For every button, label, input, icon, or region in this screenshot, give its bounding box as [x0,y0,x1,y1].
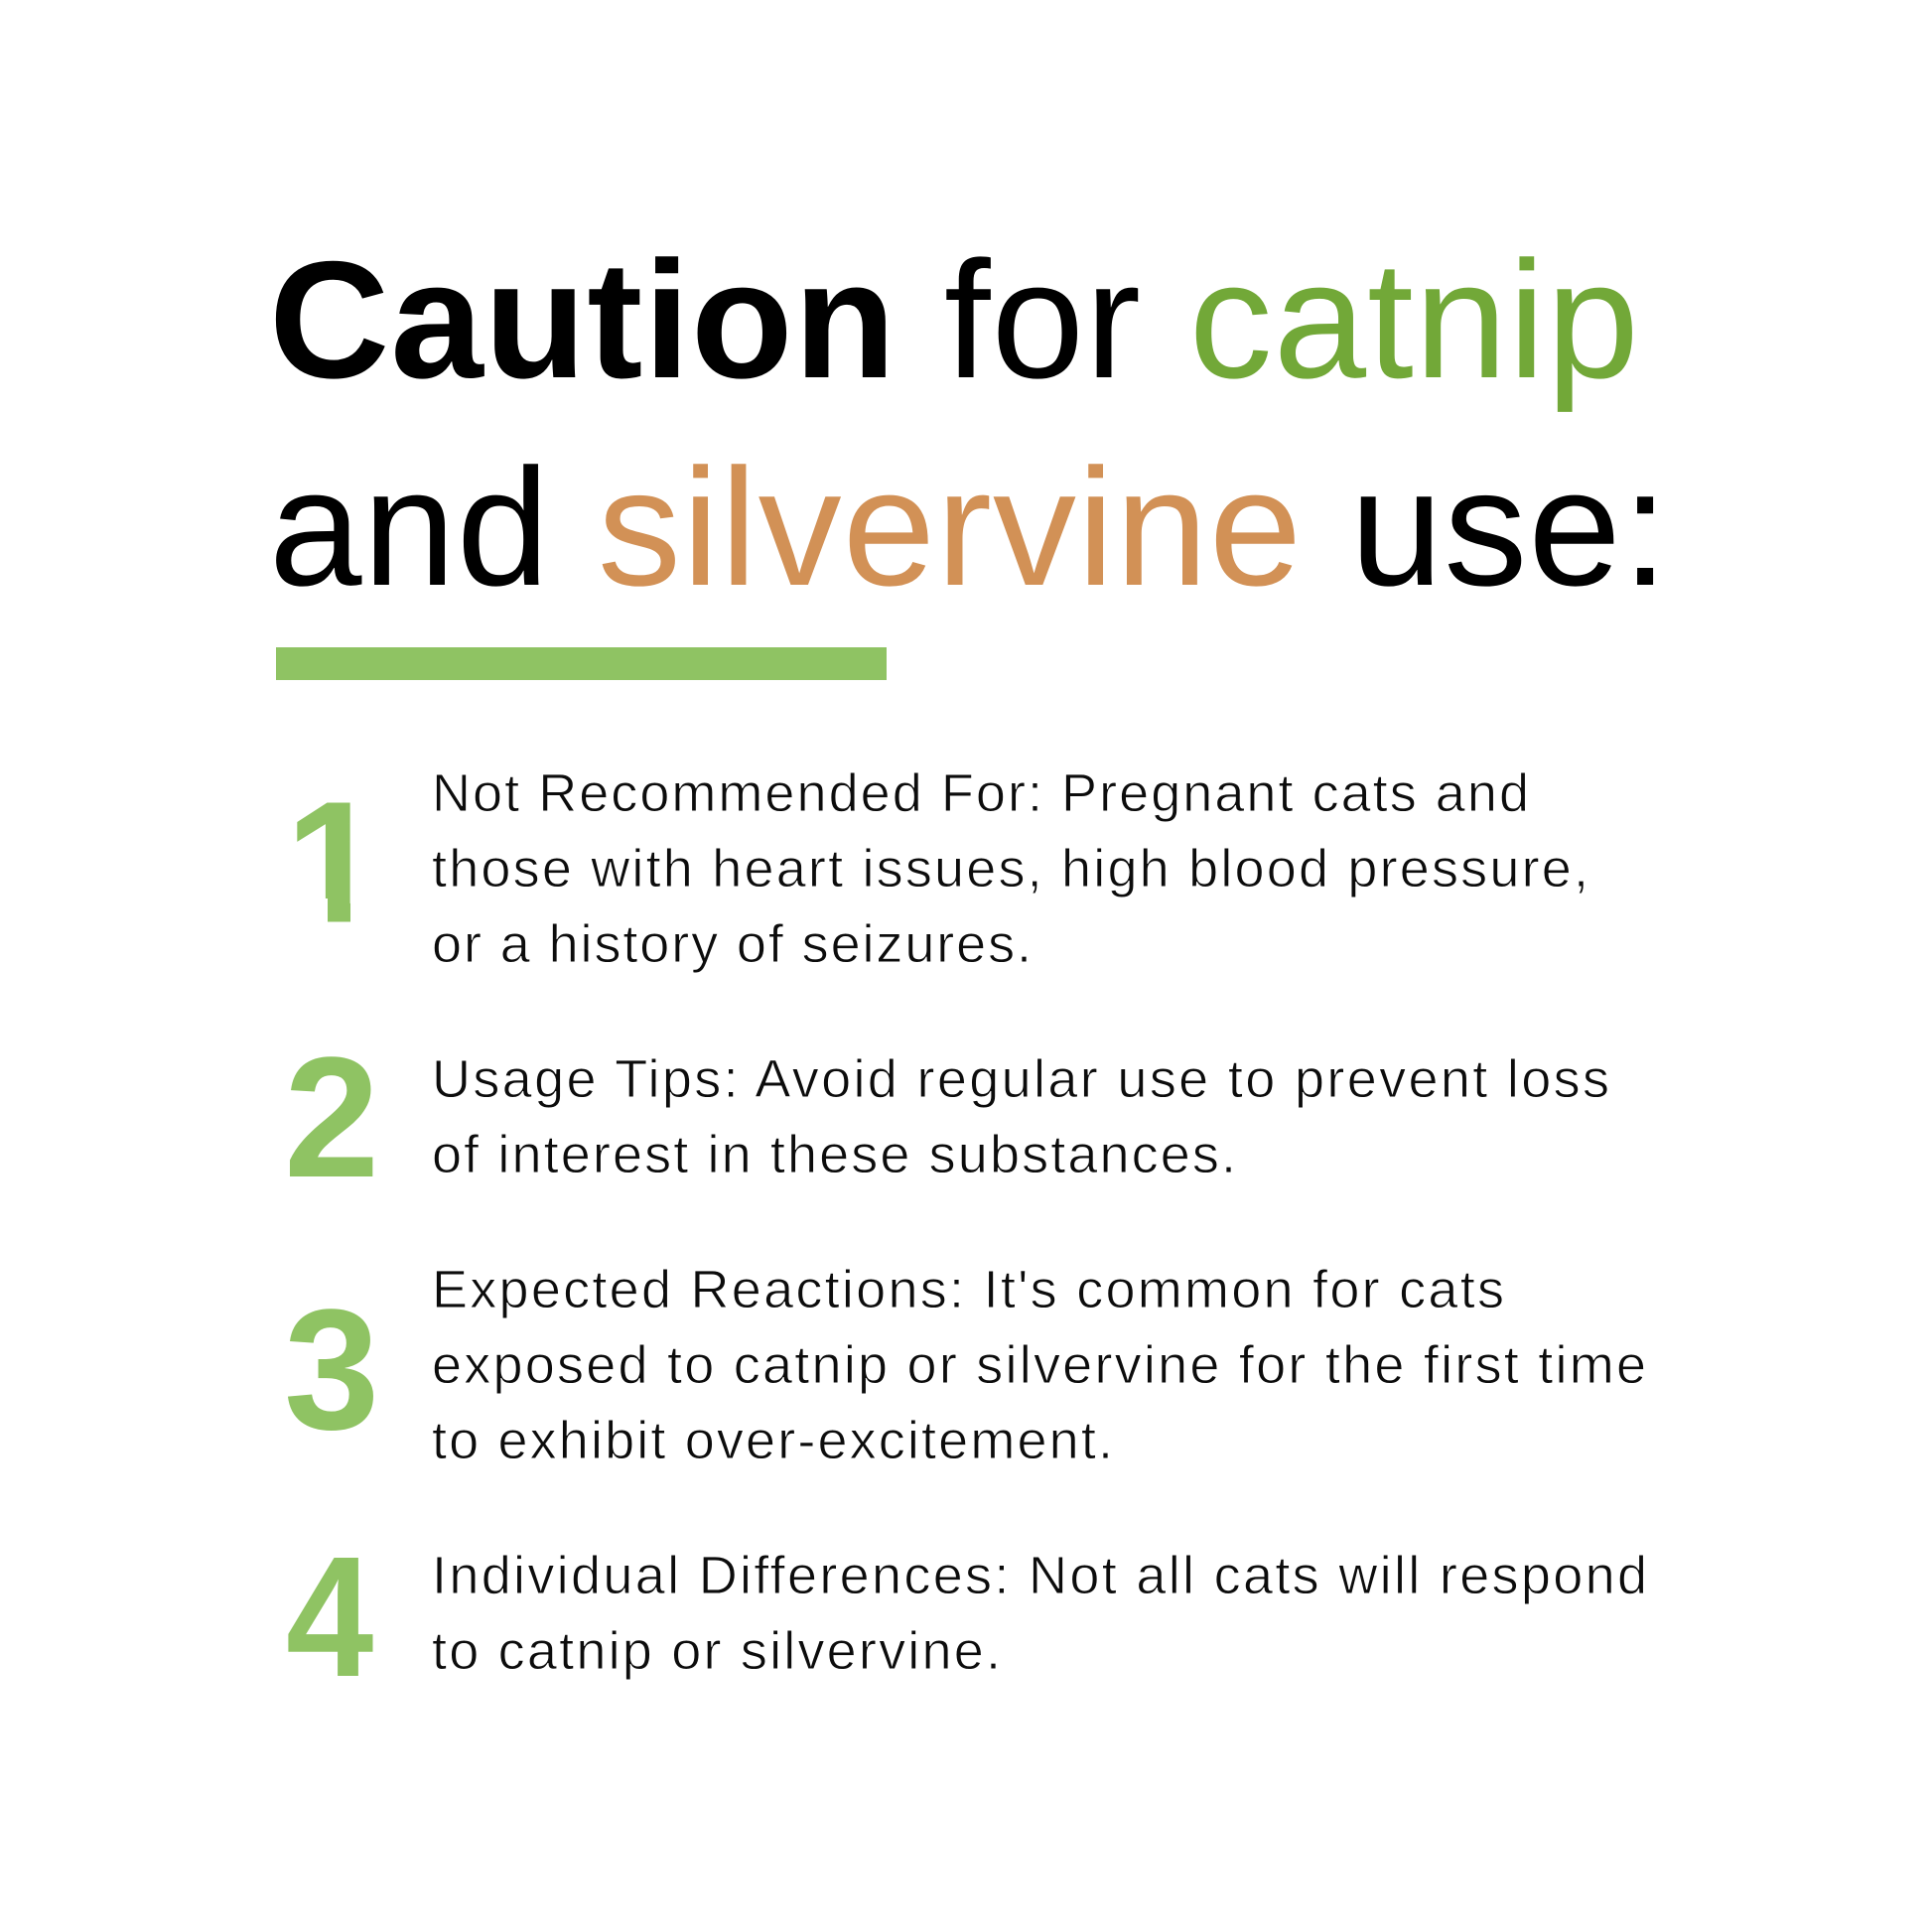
item 3 text: to exhibit over-excitement. [432,1411,1113,1470]
title: and silvervine use: [269,434,1669,621]
item 3 [284,1260,1646,1470]
item 1 text: those with heart issues, high blood pressure, [432,839,1588,898]
item 3 text: exposed to catnip or silvervine for the first time [432,1335,1646,1395]
number 2: 2 [284,1021,379,1213]
number 4: 4 [286,1522,373,1714]
item 1 text: Not Recommended For: Pregnant cats and [432,763,1529,823]
item 4 text [432,1546,1647,1681]
item 3 text [432,1260,1646,1470]
title [269,226,1669,621]
item 1 text: or a history of seizures. [432,914,1032,974]
item 1 text [432,763,1588,974]
item 2 text [432,1049,1609,1184]
number 3: 3 [284,1273,379,1465]
item 2 text: of interest in these substances. [432,1125,1236,1184]
item 1 [286,763,1588,974]
item 4 [286,1522,1647,1714]
item 2 text: Usage Tips: Avoid regular use to prevent loss [432,1049,1609,1109]
title: Caution for catnip [269,226,1640,413]
item 4 text: to catnip or silvervine. [432,1621,1001,1681]
item 3 text: Expected Reactions: It's common for cats [432,1260,1504,1319]
title underline bar [276,647,887,680]
number 1: 1 [286,765,381,958]
item 2 [284,1021,1609,1213]
item 4 text: Individual Differences: Not all cats will respond [432,1546,1647,1605]
